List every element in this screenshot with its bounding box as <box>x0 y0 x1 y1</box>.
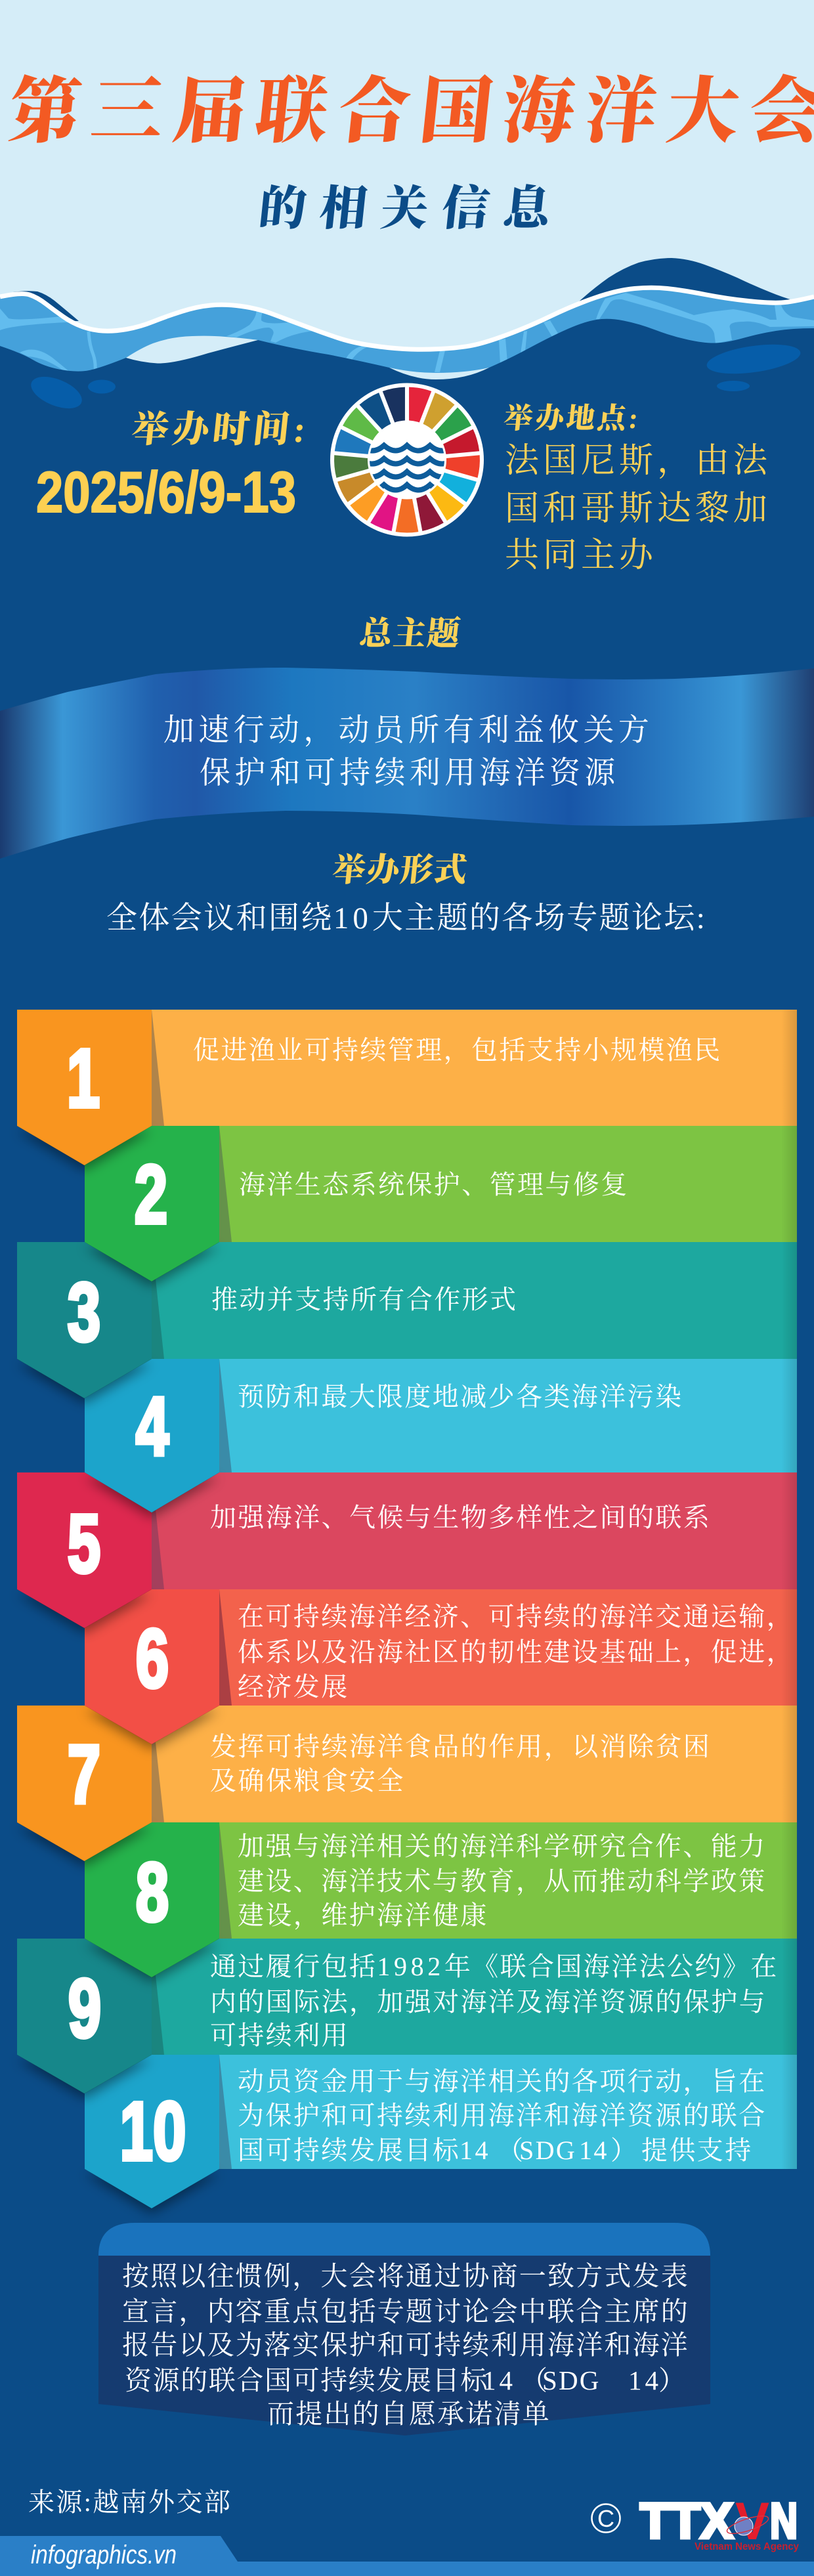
footer bar <box>0 2536 814 2576</box>
logo: TTXVN: C <box>597 2505 614 2532</box>
row 8 <box>85 1822 797 1977</box>
row 10: 国可持续发展目标 <box>238 2136 460 2165</box>
row 1: 促进渔业可持续管理，包括支持小规模渔民 <box>193 1035 722 1065</box>
row 6: 经济发展 <box>238 1672 349 1702</box>
heading: overall theme: 总主题 <box>358 615 463 652</box>
label: event location: 举办地点: <box>502 402 642 435</box>
row 4 <box>85 1359 797 1513</box>
row 4: 预防和最大限度地减少各类海洋污染 <box>238 1382 683 1411</box>
row 9: 通过履行包括1982年《联合国海洋法公约》在 <box>210 1952 779 1981</box>
outcome callout: 而提出的自愿承诺清单 <box>267 2399 551 2429</box>
location text: 国和哥斯达黎加 <box>505 490 771 528</box>
row 9 <box>17 1939 797 2093</box>
row 9: 内的国际法，加强对海洋及海洋资源的保护与 <box>210 1987 767 2017</box>
outcome callout: 报告以及为落实保护和可持续利用海洋和海洋 <box>122 2330 689 2360</box>
row 5: 5 <box>68 1499 100 1591</box>
ocean wave graphic <box>0 258 814 420</box>
row 7 <box>17 1706 797 1861</box>
row 6: 在可持续海洋经济、可持续的海洋交通运输， <box>238 1602 794 1631</box>
row 2: 海洋生态系统保护、管理与修复 <box>239 1170 629 1199</box>
row 9: 可持续利用 <box>210 2021 349 2050</box>
theme ribbon <box>0 668 814 859</box>
row 3: 3 <box>68 1267 100 1359</box>
row 10: （ <box>497 2136 525 2165</box>
outcome callout <box>98 2223 710 2436</box>
row 10: 14 <box>579 2136 609 2165</box>
outcome callout: 14 <box>482 2365 516 2395</box>
row 7: 及确保粮食安全 <box>210 1766 405 1795</box>
row 6 <box>85 1589 797 1744</box>
outcome callout: 14 <box>628 2365 662 2395</box>
row 8: 建设、海洋技术与教育，从而推动科学政策 <box>238 1866 767 1896</box>
source: 来源:越南外交部 <box>28 2487 232 2517</box>
logo: TTXVN: Vietnam News Agency <box>695 2541 799 2552</box>
row 5 <box>17 1472 797 1628</box>
row 8: 建设，维护海洋健康 <box>238 1900 488 1930</box>
outcome callout: 按照以往惯例，大会将通过协商一致方式发表 <box>122 2261 689 2291</box>
logo: TTXVN: TTX <box>640 2493 733 2549</box>
row 3 <box>17 1242 797 1398</box>
row 4: 4 <box>136 1381 169 1473</box>
date: 2025/6/9-13 <box>36 460 296 525</box>
row 10: 动员资金用于与海洋相关的各项行动，旨在 <box>238 2067 767 2096</box>
heading: event format: 举办形式 <box>331 851 470 888</box>
footer bar: infographics.vn <box>31 2541 177 2569</box>
row 9: 9 <box>68 1964 101 2055</box>
title: 第三届联合国海洋大会 <box>5 72 814 152</box>
row 8: 8 <box>136 1847 169 1939</box>
theme text: 加速行动，动员所有利益攸关方 <box>163 714 653 748</box>
format description: 全体会议和围绕10大主题的各场专题论坛: <box>106 901 706 935</box>
row 6: 6 <box>136 1614 169 1706</box>
row 1 <box>17 1010 797 1165</box>
row 10: ） <box>610 2136 638 2165</box>
theme text: 保护和可持续利用海洋资源 <box>200 756 620 790</box>
row 8: 加强与海洋相关的海洋科学研究合作、能力 <box>238 1832 767 1861</box>
row 10: SDG <box>519 2136 576 2165</box>
row 10: 10 <box>120 2086 186 2178</box>
row 6: 体系以及沿海社区的韧性建设基础上，促进， <box>238 1637 794 1667</box>
label: event time: 举办时间: <box>130 410 311 450</box>
outcome callout: ） <box>658 2365 687 2395</box>
row 3: 推动并支持所有合作形式 <box>211 1285 517 1314</box>
row 10: 提供支持 <box>641 2136 753 2165</box>
location text: 法国尼斯，由法 <box>505 442 771 480</box>
row 10: 14 <box>460 2136 490 2165</box>
row 1: 1 <box>67 1033 100 1125</box>
outcome callout: SDG <box>542 2365 601 2395</box>
row 7: 7 <box>68 1729 100 1821</box>
logo: TTXVN <box>592 2492 799 2552</box>
logo: TTXVN: N <box>770 2493 798 2549</box>
logo: TTXVN: V <box>735 2492 769 2551</box>
header sky panel <box>0 0 814 420</box>
row 2 <box>85 1126 797 1281</box>
outcome callout: （ <box>521 2365 549 2395</box>
row 10: 为保护和可持续利用海洋和海洋资源的联合 <box>238 2101 767 2130</box>
location text: 共同主办 <box>505 537 657 574</box>
row 5: 加强海洋、气候与生物多样性之间的联系 <box>210 1503 711 1532</box>
outcome callout: 资源的联合国可持续发展目标 <box>125 2365 488 2395</box>
outcome callout: 宣言，内容重点包括专题讨论会中联合主席的 <box>122 2296 689 2327</box>
row 10 <box>85 2055 797 2208</box>
icon: SDG wheel with waves <box>330 383 484 537</box>
row 7: 发挥可持续海洋食品的作用，以消除贫困 <box>210 1732 711 1761</box>
row 2: 2 <box>135 1149 167 1241</box>
subtitle: 的相关信息 <box>256 182 567 235</box>
